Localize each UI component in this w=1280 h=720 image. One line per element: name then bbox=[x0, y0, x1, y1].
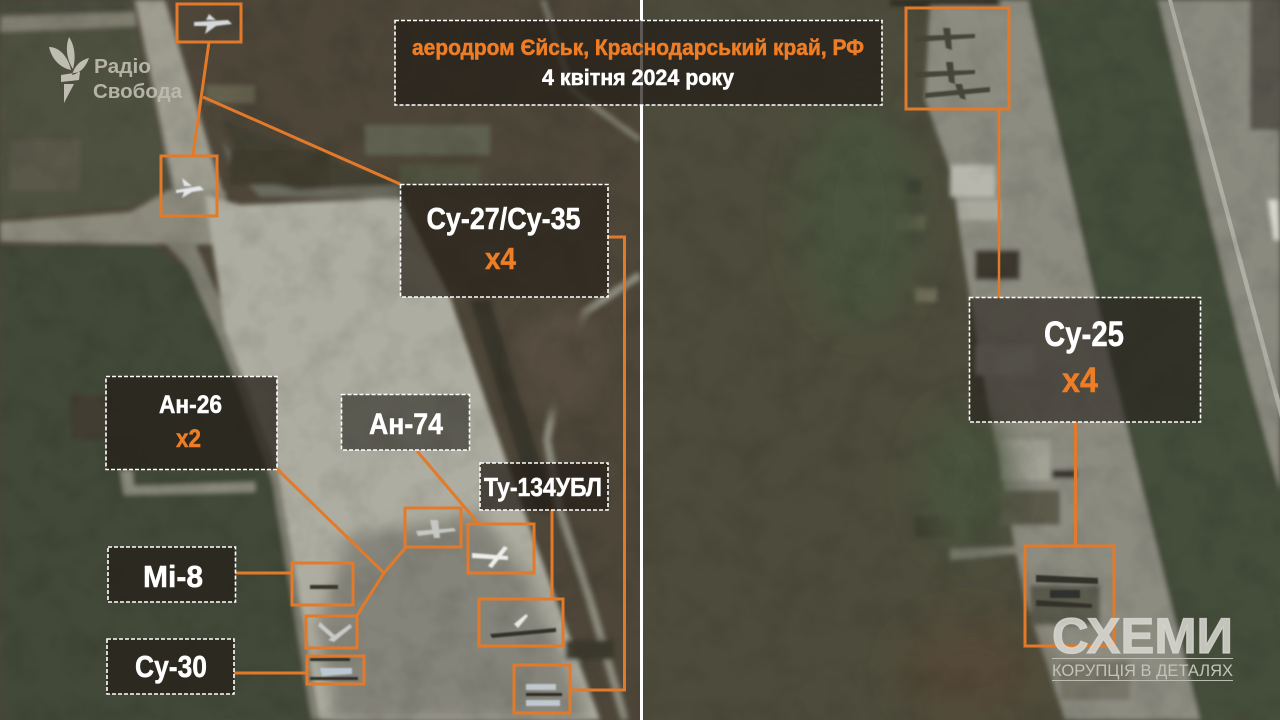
label: Мі-8: Мі-8 bbox=[143, 559, 203, 594]
icon: torch flame bbox=[49, 37, 89, 103]
label: Су-30 bbox=[107, 639, 234, 694]
plane: Су-30 bbox=[320, 668, 352, 676]
aircraft highlight boxes bbox=[161, 4, 1114, 713]
label: Су-25: x4 bbox=[1062, 361, 1098, 400]
label: Ту-134УБЛ: Ту-134УБЛ bbox=[484, 472, 602, 502]
label: Ан-26: x2 bbox=[176, 425, 201, 453]
connector lines bbox=[193, 42, 1076, 690]
logo: Схеми: СХЕМИ bbox=[1052, 608, 1233, 664]
label: Су-25 bbox=[970, 298, 1200, 422]
label: Ан-74: Ан-74 bbox=[369, 408, 443, 441]
label: Су-30: Су-30 bbox=[135, 649, 207, 684]
logo: Радіо Свобода: Свобода bbox=[93, 81, 183, 103]
planes: Су-25 bottom bbox=[1036, 575, 1098, 608]
plane: Ан-26 lower bbox=[318, 622, 352, 642]
title box: аеродром Єйськ, Краснодарський край, РФ bbox=[412, 35, 864, 60]
right satellite panel bbox=[643, 0, 1280, 720]
logo: Радіо Свобода bbox=[49, 37, 183, 103]
plane: Су-27 lower bbox=[176, 178, 204, 198]
label: Су-27/Су-35: x4 bbox=[485, 241, 517, 276]
plane: Мі-8 bbox=[310, 585, 338, 589]
label: Су-25: Су-25 bbox=[1044, 315, 1124, 354]
planes: Су-25 top three bbox=[915, 28, 975, 50]
label: Ан-26 bbox=[106, 376, 277, 470]
label: Ан-74 bbox=[342, 394, 470, 450]
plane: Ан-74 bbox=[472, 546, 508, 568]
logo: Радіо Свобода: Радіо bbox=[94, 56, 151, 78]
central divider bbox=[640, 0, 643, 720]
label: Мі-8 bbox=[108, 547, 236, 602]
plane: Су-27 top bbox=[194, 14, 232, 34]
left satellite panel bbox=[0, 0, 641, 720]
runway marking bbox=[1168, 0, 1280, 418]
logo: Схеми: КОРУПЦІЯ В ДЕТАЛЯХ bbox=[1052, 661, 1233, 680]
title box bbox=[395, 20, 882, 105]
plane: Ту-134УБЛ bbox=[490, 628, 556, 638]
label: Ту-134УБЛ bbox=[480, 463, 608, 510]
darker lower apron bbox=[318, 305, 605, 720]
label: Су-27/Су-35 bbox=[400, 184, 608, 297]
plane: Су-27 bottom pair bbox=[526, 684, 560, 706]
label: Ан-26: Ан-26 bbox=[159, 391, 222, 419]
title box: 4 квітня 2024 року bbox=[542, 65, 735, 90]
aircraft on panels bbox=[176, 14, 1098, 706]
plane: Ан-26 upper bbox=[416, 520, 456, 538]
label: Су-27/Су-35: Су-27/Су-35 bbox=[426, 201, 580, 236]
